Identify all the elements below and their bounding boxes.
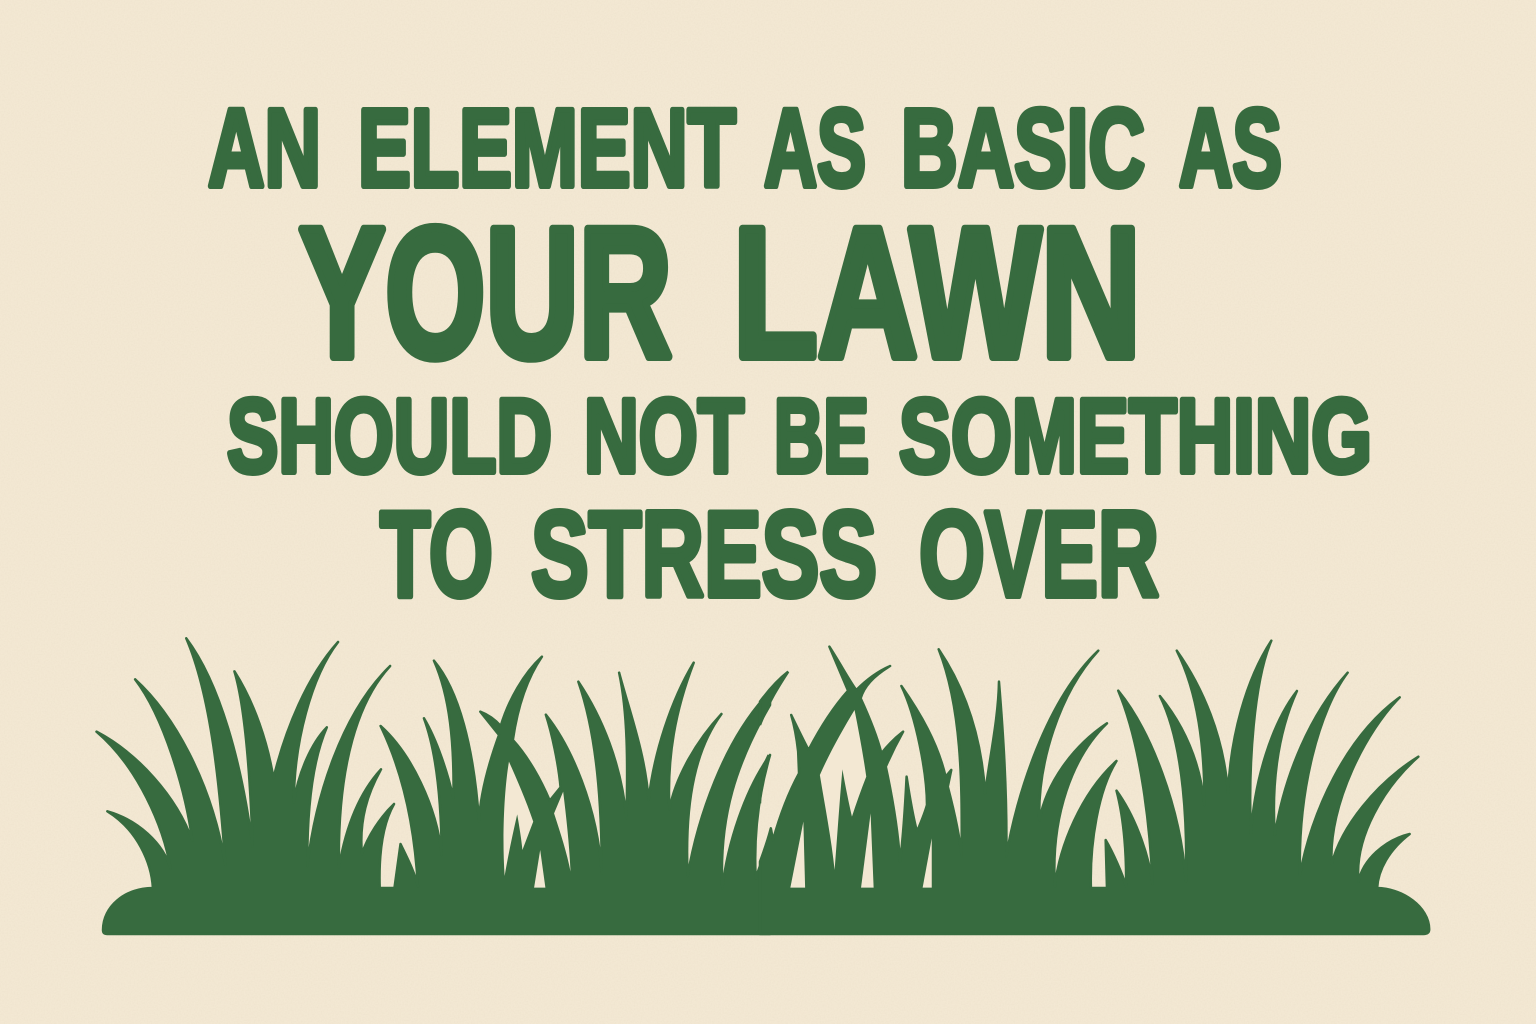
- headline line 1: ELEMENT: [358, 87, 736, 210]
- headline line 2: YOUR LAWN: LAWN: [733, 190, 1141, 396]
- grass: right half: [760, 641, 1429, 934]
- headline line 1: AN: [208, 87, 321, 210]
- headline line 3: SHOULD: [227, 378, 552, 495]
- headline line 4: STRESS: [531, 486, 877, 622]
- title: headline text: [208, 87, 1372, 622]
- illustration: grass silhouette: [97, 638, 1429, 934]
- grass: left half: [97, 638, 770, 934]
- headline line 1: AS: [764, 87, 866, 210]
- headline line 1: [208, 87, 1282, 210]
- headline line 4: [380, 486, 1159, 622]
- headline line 3: SOMETHING: [899, 378, 1372, 495]
- headline line 4: TO: [380, 486, 493, 622]
- headline line 2: YOUR LAWN: YOUR: [299, 190, 672, 396]
- headline line 1: BASIC: [901, 87, 1145, 210]
- headline line 1: AS: [1179, 87, 1282, 210]
- headline line 3: NOT: [584, 378, 744, 495]
- headline line 4: OVER: [919, 486, 1159, 622]
- headline line 3: [227, 378, 1372, 495]
- headline line 3: BE: [774, 378, 869, 495]
- headline line 2: YOUR LAWN: [299, 190, 1141, 396]
